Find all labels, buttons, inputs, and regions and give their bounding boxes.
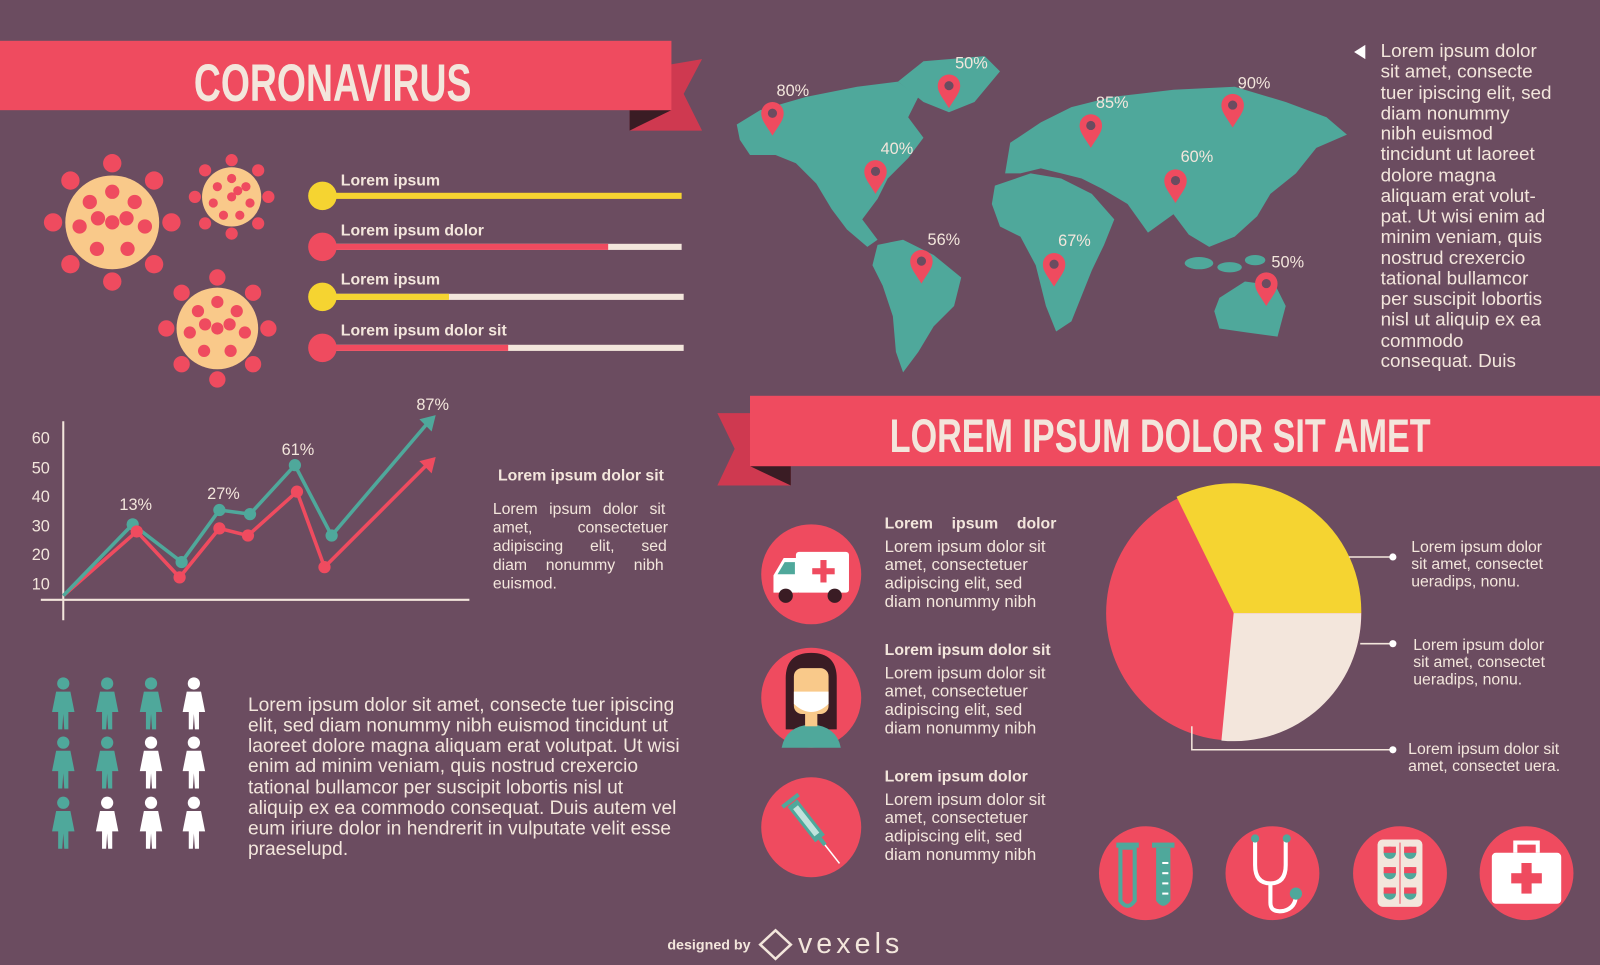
title: CORONAVIRUS <box>194 54 471 113</box>
title banner: coronavirus <box>0 41 702 131</box>
icon texts: adipiscing elit, sed <box>885 700 1022 719</box>
icon texts: diam nonummy nibh <box>885 845 1036 864</box>
people icons <box>52 677 205 849</box>
map pins: 67% <box>1058 232 1091 250</box>
pie leaders <box>1192 557 1393 750</box>
map pins: 56% <box>928 231 960 249</box>
icon texts: Lorem ipsum dolor sit <box>885 663 1046 682</box>
right text block: consequat. Duis <box>1381 350 1516 371</box>
map pins: 50% <box>1271 253 1304 271</box>
section banner <box>717 396 1600 486</box>
pie chart: sit amet, consectet <box>1413 654 1546 671</box>
line chart: 20 <box>32 546 50 564</box>
people paragraph: laoreet dolore magna aliquam erat volutpat. Ut wisi <box>248 736 680 757</box>
icon texts: amet, consectetuer <box>885 808 1028 827</box>
people paragraph <box>248 695 680 860</box>
people paragraph: aliquip ex ea commodo consequat. Duis autem vel <box>248 798 676 819</box>
icon texts: amet, consectetuer <box>885 555 1028 574</box>
pie chart: ueradips, nonu. <box>1411 574 1520 591</box>
map pins: 50% <box>955 54 988 72</box>
right text block: tational bullamcor <box>1381 268 1528 289</box>
pie chart: amet, consectet uera. <box>1408 758 1560 775</box>
right text block: tuer ipiscing elit, sed <box>1381 82 1552 103</box>
right text block: sit amet, consecte <box>1381 61 1533 82</box>
icon texts: Lorem ipsum dolor sit <box>885 537 1046 556</box>
chart description: amet, consectetuer <box>493 519 668 536</box>
right text block: Lorem ipsum dolor <box>1381 40 1537 61</box>
line chart: 50 <box>32 459 50 477</box>
chart description: Lorem ipsum dolor sit <box>493 501 666 518</box>
line chart: 61% <box>282 441 314 459</box>
footer: designed by vexels <box>667 928 903 960</box>
people paragraph: elit, sed diam nonummy nibh euismod tincidunt ut <box>248 715 669 736</box>
footer: designed by vexels: vexels <box>798 928 903 960</box>
map pins <box>761 54 1304 306</box>
right text block: nibh euismod <box>1381 123 1493 144</box>
chart description: euismod. <box>493 576 557 593</box>
icon texts: adipiscing elit, sed <box>885 574 1022 593</box>
people paragraph: praeselupd. <box>248 839 348 860</box>
pie chart: sit amet, consectet <box>1411 556 1544 573</box>
pie chart <box>1106 483 1560 775</box>
icon texts: Lorem ipsum dolor <box>885 768 1028 785</box>
line chart: 10 <box>32 576 50 594</box>
progress bars: Lorem ipsum <box>341 173 440 190</box>
right text block: per suscipit lobortis <box>1381 288 1542 309</box>
icon texts <box>885 515 1056 864</box>
right text block: minim veniam, quis <box>1381 226 1542 247</box>
footer: designed by vexels: designed by <box>667 938 751 954</box>
virus illustrations <box>44 154 277 388</box>
map pins: 90% <box>1238 75 1270 93</box>
pie chart: Lorem ipsum dolor <box>1411 539 1542 556</box>
people paragraph: Lorem ipsum dolor sit amet, consecte tuer ipiscing <box>248 695 674 716</box>
map pins: 85% <box>1096 94 1129 112</box>
right text block: dolore magna <box>1381 165 1496 186</box>
progress bars: Lorem ipsum <box>341 272 440 289</box>
map pins: 40% <box>881 140 913 158</box>
icon texts: diam nonummy nibh <box>885 592 1036 611</box>
right text block: aliquam erat volut- <box>1381 185 1536 206</box>
chart description <box>493 467 668 593</box>
right text block: diam nonummy <box>1381 102 1510 123</box>
icon: doctor with mask <box>761 648 861 748</box>
pie chart: Lorem ipsum dolor <box>1413 637 1544 654</box>
progress bars: Lorem ipsum dolor sit <box>341 323 507 340</box>
icon texts: diam nonummy nibh <box>885 718 1036 737</box>
icon: first aid kit <box>1480 826 1573 920</box>
people paragraph: tational bullamcor per suscipit lobortis nisl ut <box>248 778 624 799</box>
line chart <box>32 396 469 620</box>
icon: syringe <box>761 777 861 877</box>
line chart: 87% <box>416 396 449 414</box>
icon texts: amet, consectetuer <box>885 682 1028 701</box>
right text block <box>1354 40 1552 371</box>
pie chart: ueradips, nonu. <box>1413 671 1522 688</box>
icon texts: Lorem ipsum dolor sit <box>885 790 1046 809</box>
people paragraph: eum iriure dolor in hendrerit in vulputate velit esse <box>248 818 671 839</box>
chart description: adipiscing elit, sed <box>493 538 667 555</box>
right text block: pat. Ut wisi enim ad <box>1381 205 1545 226</box>
icon: ambulance <box>761 524 861 624</box>
right text block: tincidunt ut laoreet <box>1381 143 1536 164</box>
icon: test tubes <box>1099 826 1193 920</box>
line chart: 40 <box>32 488 50 506</box>
right text block: commodo <box>1381 330 1463 351</box>
icon: pills <box>1353 826 1447 920</box>
icon texts: Lorem ipsum dolor <box>885 515 1056 532</box>
line chart: 13% <box>119 496 152 514</box>
people paragraph: enim ad minim veniam, quis nostrud crexercio <box>248 756 638 777</box>
right text block: nostrud crexercio <box>1381 247 1525 268</box>
map pins: 80% <box>777 82 809 100</box>
chart description: diam nonummy nibh <box>493 557 664 574</box>
map pins: 60% <box>1181 148 1213 166</box>
progress bars: Lorem ipsum dolor <box>341 223 484 240</box>
icon: stethoscope <box>1226 826 1319 920</box>
progress bars <box>308 173 684 362</box>
world map <box>737 54 1347 372</box>
chart description: Lorem ipsum dolor sit <box>498 467 665 484</box>
line chart: 60 <box>32 430 50 448</box>
pie chart: Lorem ipsum dolor sit <box>1408 741 1560 758</box>
line chart: 30 <box>32 517 50 535</box>
line chart: 27% <box>207 485 240 503</box>
icon texts: Lorem ipsum dolor sit <box>885 642 1051 659</box>
right text block: nisl ut aliquip ex ea <box>1381 308 1542 329</box>
icon texts: adipiscing elit, sed <box>885 827 1022 846</box>
